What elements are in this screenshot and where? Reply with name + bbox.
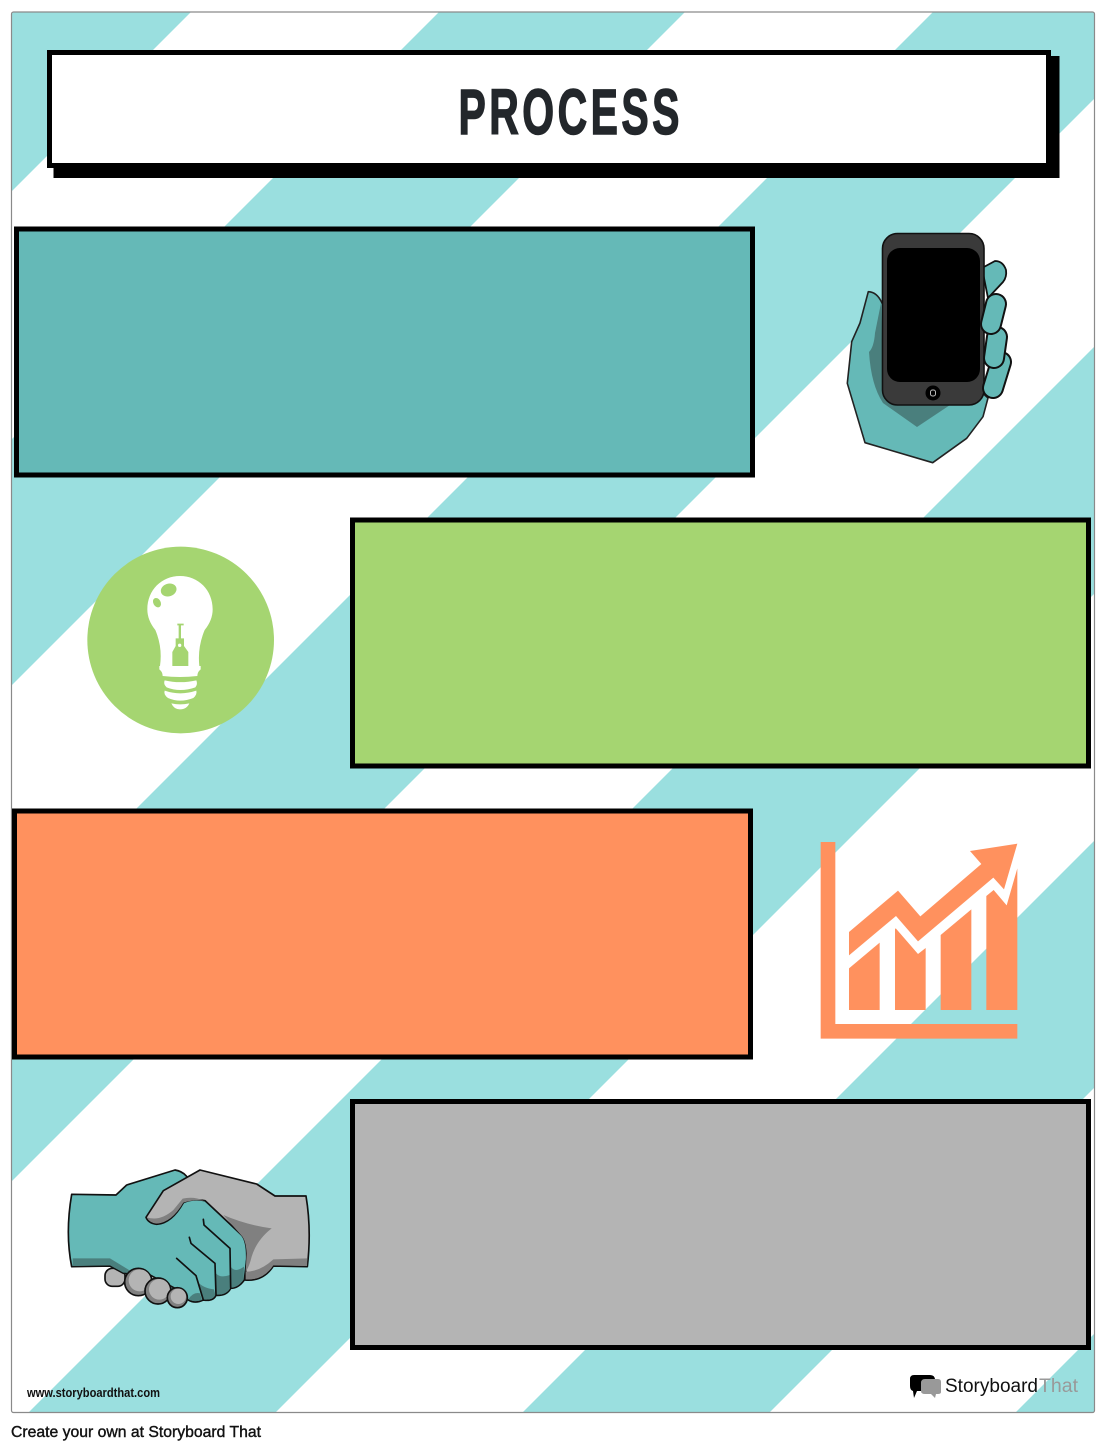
icon: handshake — [68, 1170, 309, 1308]
Storyboard That logo — [910, 1375, 1079, 1398]
phone home button — [926, 386, 940, 400]
title banner shadow — [54, 56, 1060, 178]
green circle — [87, 547, 274, 733]
title banner — [50, 52, 1060, 178]
teal hand — [68, 1170, 247, 1302]
icon: hand holding smartphone — [847, 234, 1006, 463]
icon: light bulb in green circle — [87, 547, 274, 733]
panel: gray text box — [352, 1102, 1088, 1348]
finger 3 — [994, 337, 997, 358]
panel: green text box — [352, 520, 1088, 766]
panel: orange text box — [14, 811, 750, 1057]
finger 4 — [993, 362, 1001, 388]
gray hand shadows — [147, 1198, 307, 1279]
knuckle 1 — [105, 1268, 125, 1286]
title banner box — [50, 52, 1048, 166]
logo gray speech bubble — [921, 1379, 941, 1398]
back finger — [982, 261, 1006, 298]
Storyboard That logo: That — [1039, 1376, 1079, 1397]
palm shadow — [869, 303, 950, 427]
phone body — [882, 234, 984, 405]
teal hand shadows — [73, 1258, 244, 1301]
bar 2 — [895, 929, 926, 1010]
bar 4 — [986, 868, 1017, 1010]
website address: www.storyboardthat.com — [26, 1385, 160, 1400]
bar 1 — [849, 943, 880, 1010]
panel: teal text box — [16, 229, 752, 475]
phone screen — [887, 248, 980, 382]
logo wordmark: Storyboard — [945, 1376, 1038, 1397]
bulb collar — [159, 666, 201, 677]
bulb highlights — [159, 582, 178, 598]
gray hand — [146, 1170, 309, 1280]
teal finger lines — [177, 1219, 231, 1300]
bulb glass — [147, 576, 213, 666]
chart axes — [821, 842, 1017, 1039]
palm — [847, 292, 988, 463]
bar 3 — [941, 909, 971, 1010]
finger 2 — [991, 304, 996, 324]
footer credit: Create your own at Storyboard That — [11, 1424, 262, 1441]
icon: rising bar chart with arrow — [821, 842, 1017, 1039]
filament — [172, 624, 188, 667]
trend arrow — [849, 844, 1017, 955]
gray fingers — [125, 1268, 187, 1308]
heading: PROCESS: PROCESS — [458, 77, 683, 148]
logo black speech bubble — [910, 1375, 935, 1398]
bulb threads — [164, 680, 197, 690]
